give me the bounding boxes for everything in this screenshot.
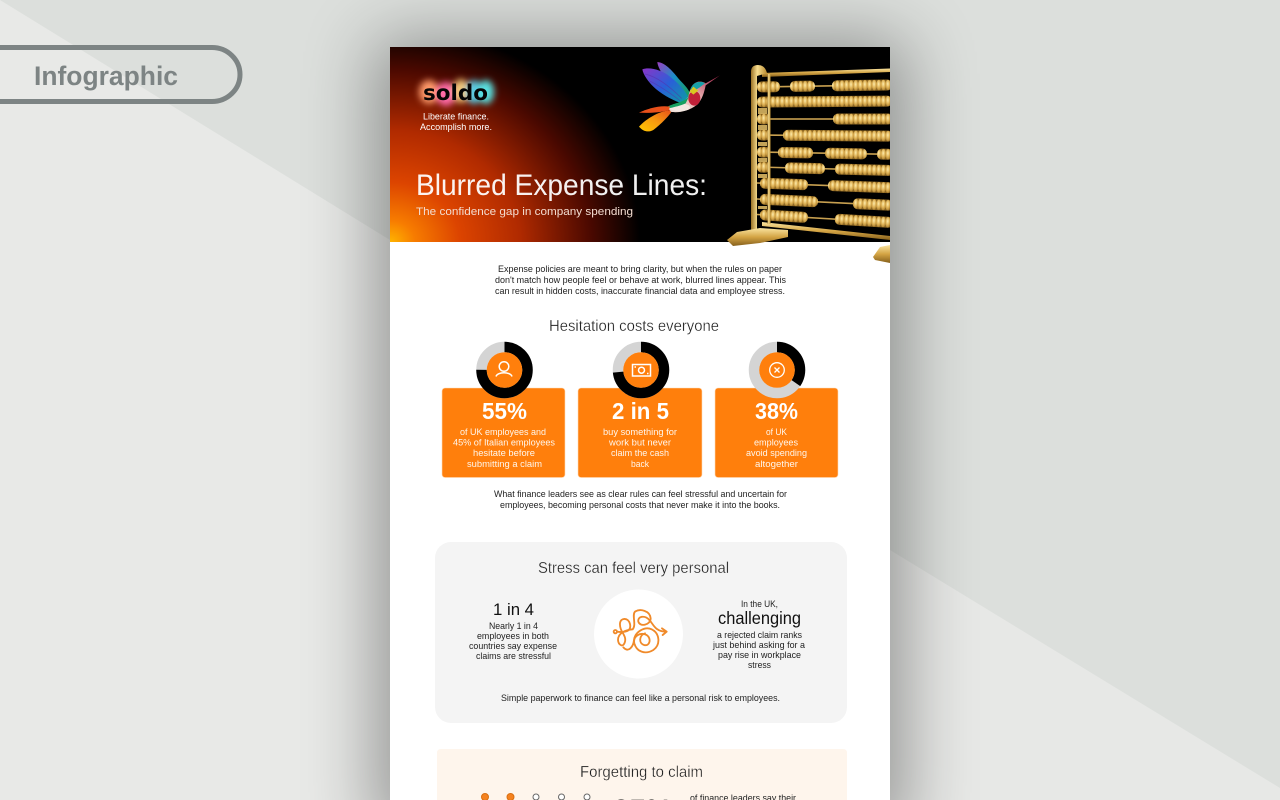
stat: challenging: just behind asking for a — [712, 640, 806, 650]
card: 38%: employees — [754, 438, 798, 448]
donut chart: 2 in 5 — [618, 347, 664, 393]
intro paragraph: Expense policies are meant to bring clarity, but when the rules on paper — [498, 264, 782, 274]
infographic badge: Infographic — [34, 61, 178, 91]
left post — [751, 65, 767, 232]
heading: forgetting: Forgetting to claim — [580, 764, 703, 781]
stat: 1 in 4: countries say expense — [469, 641, 557, 651]
card: 55%: 45% of Italian employees — [453, 438, 556, 448]
summary paragraph: What finance leaders see as clear rules can feel stressful and uncertain for — [494, 489, 787, 499]
summary paragraph: employees, becoming personal costs that never make it into the books. — [500, 500, 780, 510]
page sheet — [390, 47, 890, 800]
intro paragraph: don't match how people feel or behave at work, blurred lines appear. This — [495, 275, 786, 285]
left foot — [727, 228, 788, 246]
card: 55%: 55% — [482, 398, 527, 424]
stat: challenging: a rejected claim ranks — [717, 630, 802, 640]
summary paragraph — [494, 489, 787, 510]
stat: 1 in 4 — [469, 600, 557, 661]
inner post — [768, 74, 770, 224]
soldo logo: Liberate finance. — [423, 112, 489, 122]
heading: hesitation: Hesitation costs everyone — [549, 318, 719, 335]
left post blocks — [758, 108, 767, 209]
soldo logo: Accomplish more. — [420, 122, 492, 132]
heading: stress: Stress can feel very personal — [538, 560, 729, 577]
icon: banknote — [632, 364, 650, 376]
panel: forgetting to claim — [437, 749, 847, 800]
card: 2 in 5: buy something for — [603, 427, 677, 437]
stat: 1 in 4: employees in both — [477, 631, 549, 641]
icon: person — [496, 362, 512, 376]
page shadow — [375, 40, 905, 800]
intro paragraph: can result in hidden costs, inaccurate financial data and employee stress. — [495, 286, 785, 296]
panel: stress — [435, 542, 847, 723]
card: 2 in 5: back — [631, 459, 649, 469]
soldo logo: soldo — [423, 81, 488, 105]
card: 2 in 5: claim the cash — [611, 448, 669, 458]
gold abacus image — [727, 65, 893, 263]
card: 38%: altogether — [755, 459, 798, 469]
card: 2 in 5: 2 in 5 — [612, 398, 669, 424]
abacus rods and beads — [757, 79, 893, 228]
card: 55%: hesitate before — [473, 448, 535, 458]
card: 55%: of UK employees and — [460, 427, 546, 437]
hummingbird illustration — [639, 62, 720, 131]
stat: 1 in 4: 1 in 4 — [493, 600, 534, 619]
stat: 1 in 4: claims are stressful — [476, 651, 551, 661]
panel note: Simple paperwork to finance can feel like a personal risk to employees. — [501, 693, 780, 703]
stat: 1 in 4: Nearly 1 in 4 — [489, 621, 538, 631]
stat: challenging — [712, 599, 806, 670]
card: 55%: submitting a claim — [467, 459, 542, 469]
stat: challenging: In the UK, — [741, 599, 778, 609]
card: 38%: avoid spending — [746, 448, 807, 458]
card: 38% — [715, 347, 838, 478]
card: 2 in 5: work but never — [608, 438, 671, 448]
title: Blurred Expense Lines: — [416, 169, 707, 202]
frame rails — [762, 68, 890, 240]
card: 38%: 38% — [755, 398, 798, 424]
card: 2 in 5 — [578, 347, 702, 478]
donut chart: 38% — [754, 347, 800, 393]
infographic badge — [0, 48, 240, 102]
stat: challenging: stress — [748, 660, 771, 670]
tangled line circle icon — [594, 590, 683, 678]
soldo logo — [419, 79, 494, 132]
subtitle: The confidence gap in company spending — [416, 206, 633, 218]
intro paragraph — [495, 264, 786, 296]
stat: challenging: pay rise in workplace — [718, 650, 801, 660]
card: 55% — [442, 347, 565, 478]
right foot — [873, 245, 890, 263]
icon: cross in circle — [770, 363, 784, 377]
header banner — [390, 47, 890, 242]
dot scale — [482, 794, 590, 800]
donut chart: 55% — [482, 347, 528, 393]
stat: challenging: challenging — [718, 608, 801, 628]
card: 38%: of UK — [766, 427, 787, 437]
